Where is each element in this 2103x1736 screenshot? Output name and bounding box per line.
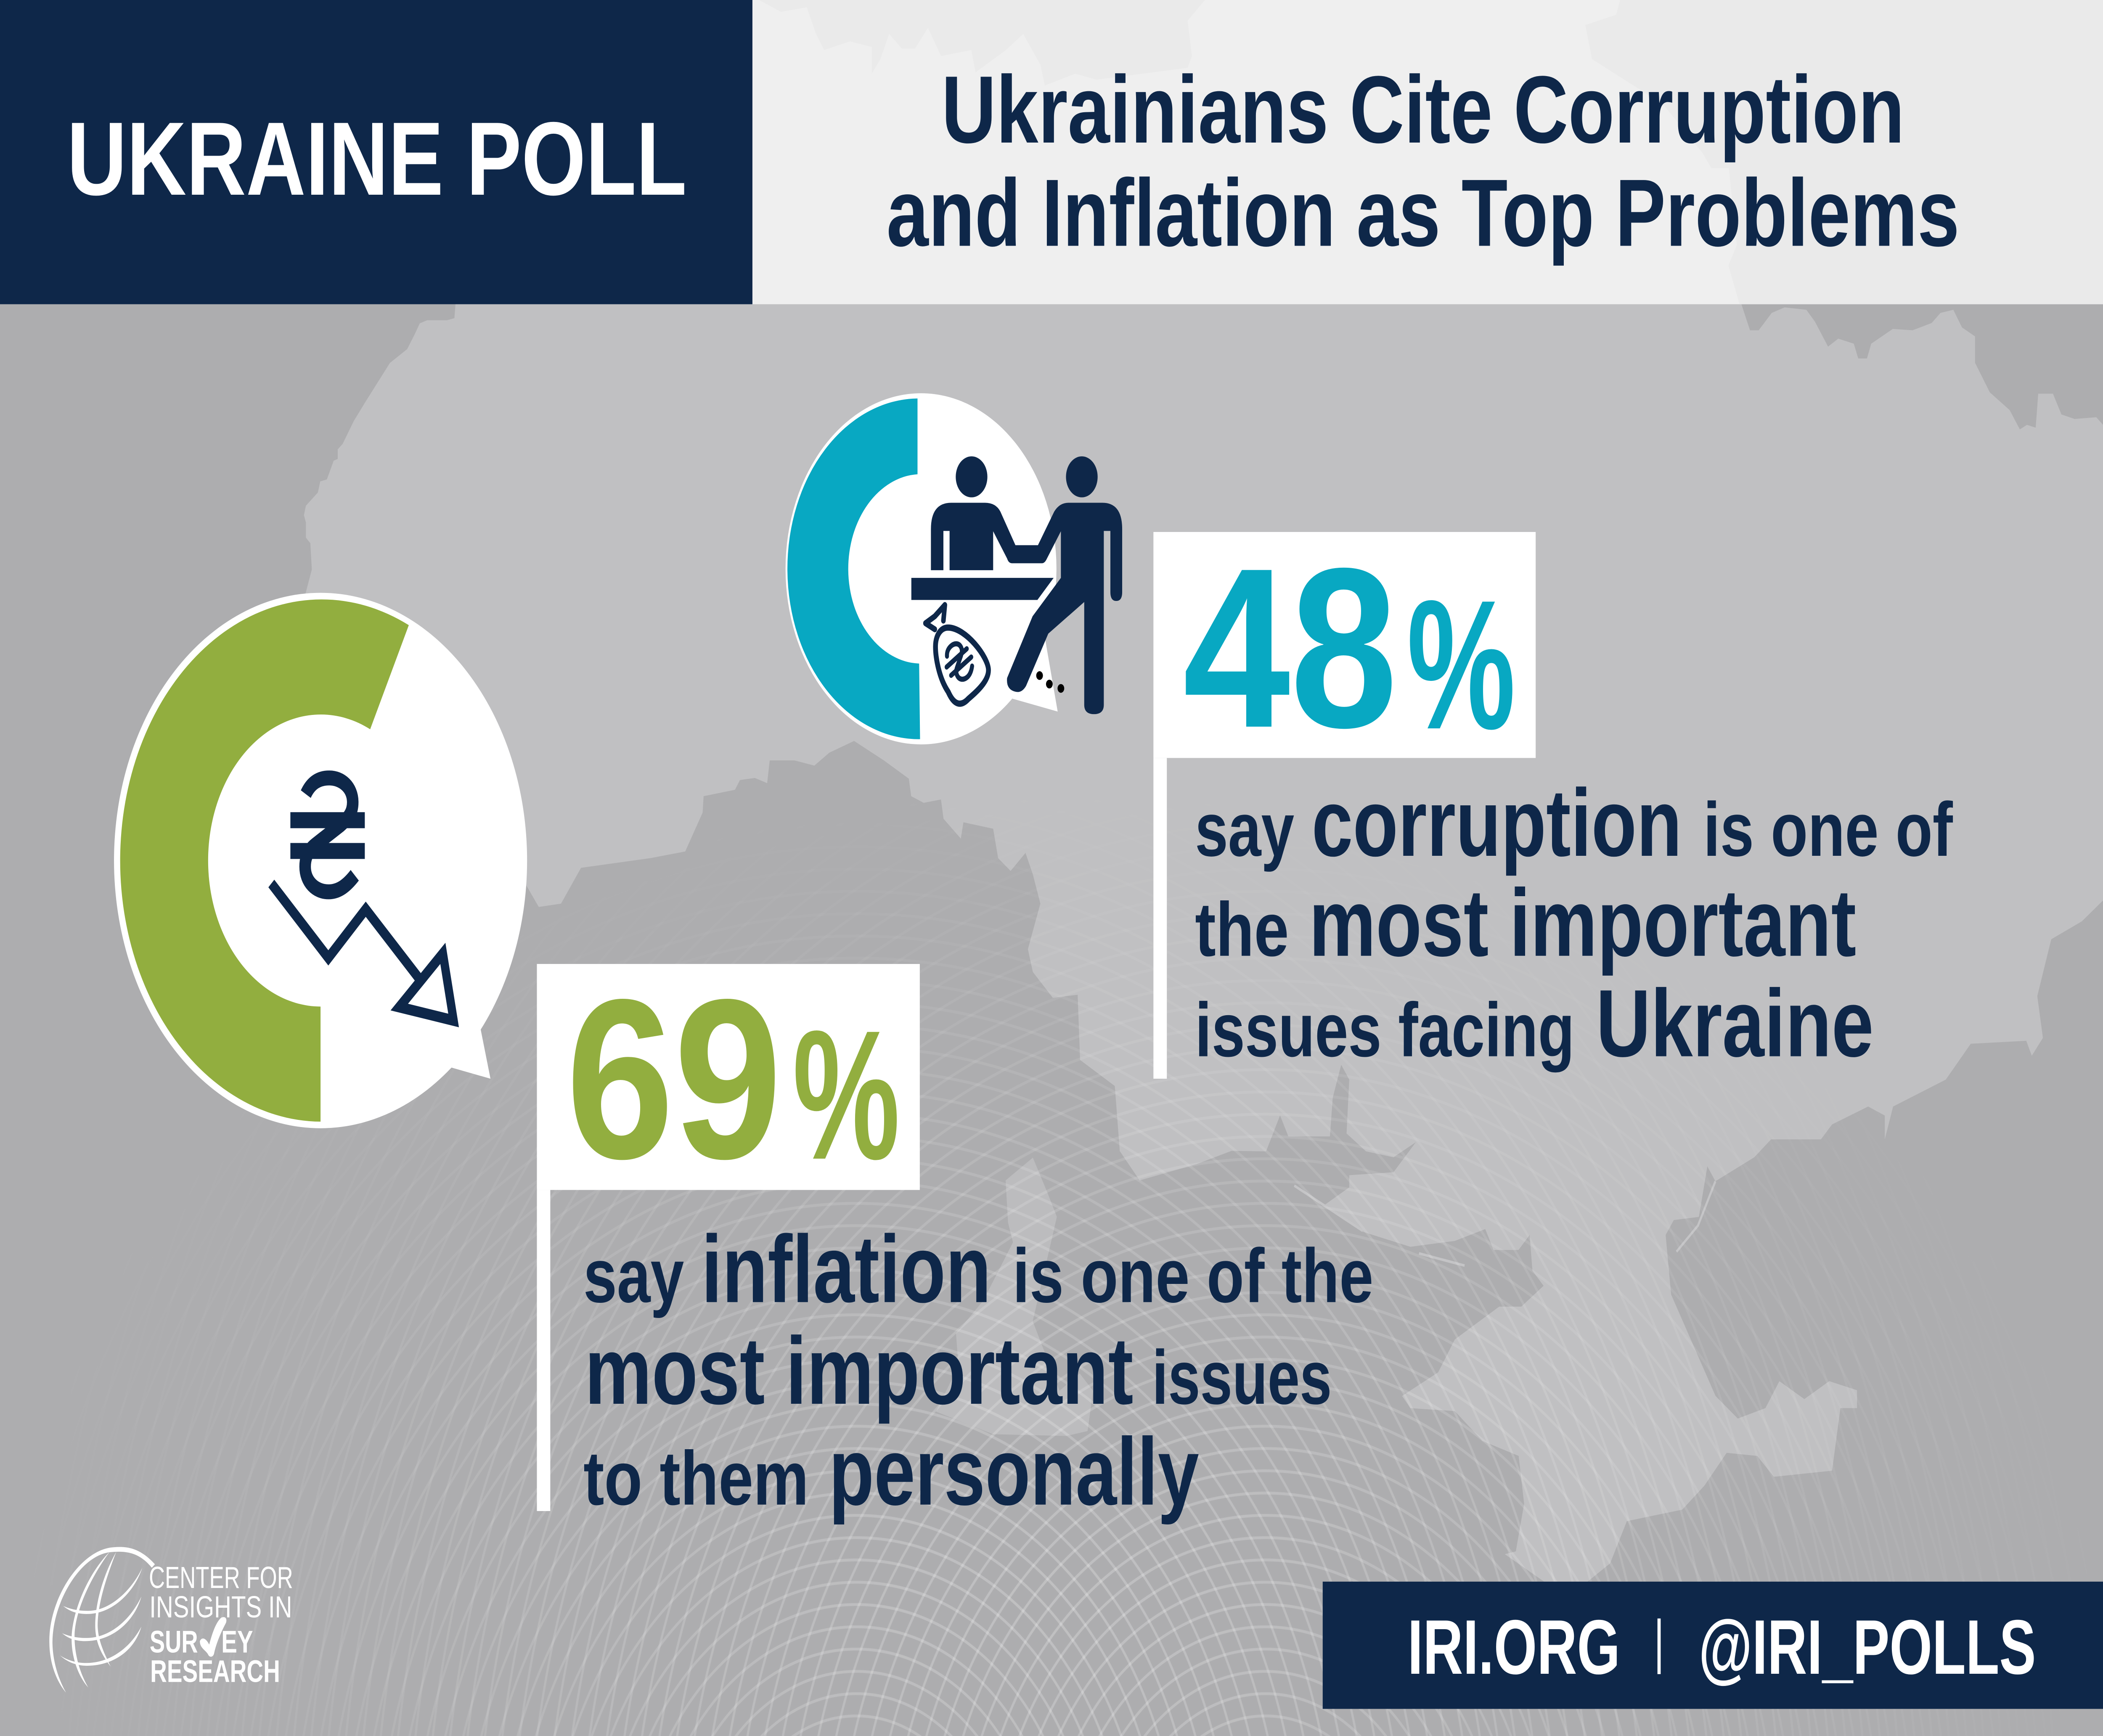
text block: corruption finding: say — [1195, 787, 1294, 872]
text block: inflation finding: issues — [1152, 1335, 1332, 1420]
icon: bribe handshake over counter — [911, 456, 1122, 714]
icon: money bag — [925, 605, 988, 704]
text block: corruption finding: Ukraine — [1596, 970, 1874, 1077]
heading — [887, 56, 1960, 267]
panel: 48 percent callout flag: % — [1407, 562, 1515, 767]
text block: corruption finding — [1195, 770, 1953, 1077]
panel: 69 percent callout flag: 69 — [566, 952, 782, 1206]
text block: corruption finding: corruption — [1312, 770, 1682, 876]
panel: 69 percent callout flag — [537, 952, 920, 1511]
heading: Ukrainians Cite Corruption — [942, 56, 1904, 163]
footer banner: @IRI_POLLS — [1699, 1604, 2036, 1690]
text block: inflation finding: say — [583, 1233, 684, 1318]
text block: inflation finding — [583, 1216, 1373, 1525]
panel: corruption donut chart and icon — [786, 393, 1122, 744]
text block: inflation finding: inflation — [702, 1216, 991, 1323]
panel: 48 percent callout flag: 48 — [1183, 521, 1398, 775]
title banner: UKRAINE POLL — [67, 100, 687, 217]
text block: corruption finding: is one of — [1703, 787, 1953, 872]
text block: corruption finding: the — [1195, 887, 1289, 972]
logo: Center for Insights in Survey Research — [49, 1547, 293, 1693]
text block: inflation finding: to them — [583, 1436, 809, 1521]
panel: 69 percent callout flag: % — [793, 992, 900, 1198]
logo: Center for Insights in Survey Research: CENTER FOR — [149, 1561, 293, 1595]
concentric ring pattern — [272, 986, 1839, 1736]
text block: inflation finding: personally — [829, 1418, 1199, 1525]
text block: inflation finding: is one of the — [1013, 1233, 1373, 1318]
title banner — [0, 0, 752, 304]
footer banner — [1323, 1582, 2103, 1709]
text block: corruption finding: issues facing — [1195, 987, 1575, 1073]
logo: Center for Insights in Survey Research: RESEARCH — [150, 1654, 280, 1689]
logo: Center for Insights in Survey Research: EY — [221, 1625, 253, 1659]
text block: corruption finding: most important — [1309, 870, 1856, 977]
logo: Center for Insights in Survey Research: INSIGHTS IN — [149, 1590, 292, 1624]
panel: 48 percent callout flag — [1153, 521, 1536, 1079]
logo: Center for Insights in Survey Research: SUR — [150, 1625, 198, 1659]
icon: globe — [49, 1547, 155, 1693]
heading: and Inflation as Top Problems — [887, 160, 1960, 267]
text block: inflation finding: most important — [585, 1318, 1134, 1424]
footer banner: IRI.ORG — [1408, 1604, 1620, 1690]
icon: hryvnia sign with falling arrow — [271, 778, 453, 1021]
panel: inflation donut chart and icon — [114, 593, 527, 1128]
